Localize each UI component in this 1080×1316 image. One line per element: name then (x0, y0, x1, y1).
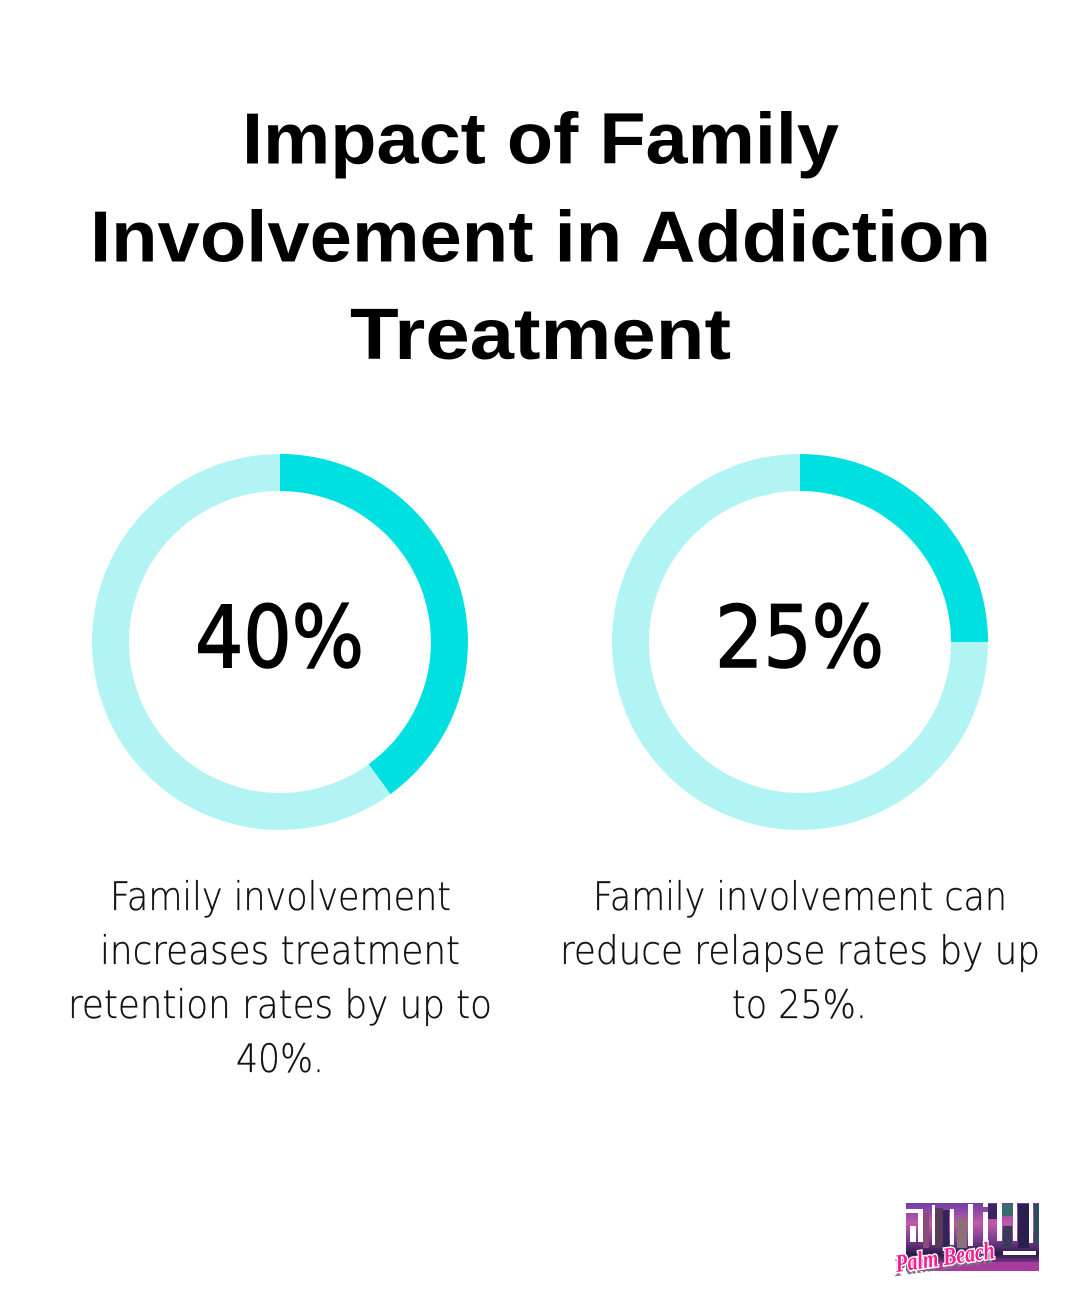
description: retention: retention rates by up to (68, 983, 492, 1028)
white letter gaps (906, 1203, 1036, 1255)
title: Involvement in Addiction (90, 198, 991, 278)
panel: 25% statistic (560, 472, 1040, 1028)
title (90, 100, 991, 375)
description: retention: 40%. (236, 1037, 324, 1082)
description: retention (68, 875, 492, 1082)
logo: Amity Palm Beach (891, 1203, 1039, 1282)
description: relapse: Family involvement can (593, 875, 1007, 920)
logo script: Palm Beach: Palm Beach (891, 1241, 995, 1282)
description: retention: Family involvement (110, 875, 451, 920)
description: relapse: to 25%. (732, 983, 867, 1028)
panel: 40% statistic (68, 472, 492, 1082)
title: Treatment (350, 295, 731, 375)
logo script: Palm Beach: Palm Beach (893, 1237, 996, 1278)
value: 40%: 40% (195, 588, 364, 688)
donut chart: 25% (630, 472, 970, 812)
description: relapse: reduce relapse rates by up (560, 929, 1040, 974)
value: 25%: 25% (715, 588, 884, 688)
description: retention: increases treatment (100, 929, 460, 974)
title: Impact of Family (242, 100, 839, 180)
donut chart: 40% (110, 472, 450, 812)
description: relapse (560, 875, 1040, 1028)
